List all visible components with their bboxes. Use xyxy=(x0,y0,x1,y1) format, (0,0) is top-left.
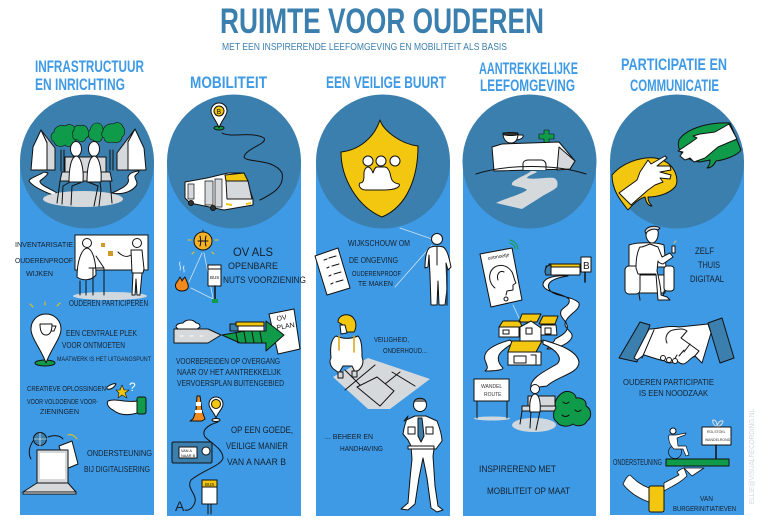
text: van burgerinitiatieven xyxy=(673,496,736,513)
text: veiligheid onderhoud: VEILIGHEID, xyxy=(374,337,409,344)
text: centrale plek: MAATWERK IS HET UITGANGSPUNT xyxy=(57,357,151,363)
icon: man in armchair xyxy=(625,226,676,300)
text: wijkschouw xyxy=(348,238,410,288)
icon: kneeling worker on pavement xyxy=(330,315,430,409)
icon: checklist xyxy=(315,248,350,295)
text: wijkschouw: DE ONGEVING xyxy=(349,256,398,265)
icon: hand with star xyxy=(107,380,146,415)
text: beheer en handhaving: ... BEHEER EN xyxy=(325,432,373,441)
panel: mobiliteit xyxy=(167,73,306,516)
icon: wandelroute sign xyxy=(474,379,510,420)
text: ov als openbare nuts voorziening: OV ALS xyxy=(233,245,273,259)
icon: hands reaching to speech bubbles xyxy=(612,123,741,210)
panel: infrastructuur en inrichting xyxy=(15,57,154,515)
text: beheer en handhaving: HANDHAVING xyxy=(340,444,383,453)
icon: car road turning into OV arrow and plan: PLAN xyxy=(276,322,295,332)
text: ondersteuning: BIJ DIGITALISERING xyxy=(84,464,150,474)
text: ov als openbare nuts voorziening: OPENBARE xyxy=(228,261,278,272)
heading: infrastructuur xyxy=(35,57,144,94)
icon: village with winding paths xyxy=(485,276,579,388)
text: zelf thuis digitaal xyxy=(690,246,724,284)
text: voorbereiden op overgang: VERVOERSPLAN BUITENGEBIED xyxy=(177,379,284,388)
icon: route from A to bus stop: A xyxy=(175,498,185,514)
heading: infrastructuur: EN INRICHTING xyxy=(35,75,125,94)
text: inventarisatie: INVENTARISATIE xyxy=(15,240,73,249)
icon: car road turning into OV arrow and plan: OV xyxy=(276,314,288,323)
title: RUIMTE VOOR OUDEREN xyxy=(220,2,544,41)
credit line: ELLIE@VISUALRECORDING.NL xyxy=(747,409,756,504)
icon: map pin with coffee cup xyxy=(30,302,61,366)
icon: smartphone with wifi: ontmoetje xyxy=(487,252,510,262)
panel: participatie en communicatie xyxy=(610,55,744,515)
icon: bulb, flame and bus stop network xyxy=(175,230,221,303)
text: wijkschouw: WIJKSCHOUW OM xyxy=(348,238,410,248)
text: creatieve oplossingen: CREATIEVE OPLOSSINGEN xyxy=(27,386,106,393)
text: creatieve oplossingen: ZIENINGEN xyxy=(40,409,79,416)
text: ondersteuning xyxy=(84,448,152,474)
icon: person on bench with bush xyxy=(512,384,591,432)
text: ov als openbare nuts voorziening: NUTS VOORZIENING xyxy=(223,275,306,286)
text: inventarisatie: OUDERENPROOF xyxy=(15,256,73,265)
text: beheer en handhaving xyxy=(325,432,383,453)
text: veiligheid onderhoud xyxy=(374,337,427,355)
heading: participatie en communicatie xyxy=(621,55,727,95)
heading: participatie en communicatie: PARTICIPATIE EN xyxy=(621,55,727,74)
icon: handshake xyxy=(619,318,734,364)
icon: wandelroute sign: WANDEL xyxy=(481,384,502,390)
heading: aantrekkelijke leefomgeving: AANTREKKELIJKE xyxy=(479,59,578,78)
icon: train and stop B: B xyxy=(583,261,590,272)
text: op een goede: OP EEN GOEDE, xyxy=(231,425,293,435)
icon: route from A to bus stop: NAAR B xyxy=(181,454,196,458)
heading: infrastructuur: INFRASTRUCTUUR xyxy=(35,57,144,76)
text: inventarisatie: WIJKEN xyxy=(26,269,53,278)
heading: aantrekkelijke leefomgeving: LEEFOMGEVING xyxy=(480,76,575,95)
icon: smartphone with wifi xyxy=(480,240,522,318)
icon: route from A to bus stop xyxy=(172,422,223,514)
icon: building with cup, cross and road xyxy=(476,130,586,209)
icon: car road turning into OV arrow and plan xyxy=(174,309,300,354)
icon: laptop with globe and tablet xyxy=(23,432,78,494)
text: ondersteuning: ONDERSTEUNING xyxy=(87,448,152,458)
text: ov als openbare nuts voorziening xyxy=(223,245,306,286)
icon: wandelroute sign: ROUTE xyxy=(484,392,502,398)
panel: aantrekkelijke leefomgeving xyxy=(462,59,596,516)
text: ondersteuning: ONDERSTEUNING xyxy=(613,458,662,467)
text: ouderen participeren: OUDEREN PARTICIPEREN xyxy=(69,299,148,308)
text: zelf thuis digitaal: ZELF xyxy=(695,246,714,256)
text: veiligheid onderhoud: ONDERHOUD... xyxy=(383,348,427,355)
text: inspirerend met mobiliteit op maat xyxy=(479,464,570,496)
text: van burgerinitiatieven: BURGERINITIATIEVEN xyxy=(673,506,736,513)
icon: whiteboard with elder and facilitator xyxy=(73,235,148,300)
text: creatieve oplossingen xyxy=(27,386,106,416)
text: voorbereiden op overgang: VOORBEREIDEN OP OVERGANG xyxy=(176,357,280,366)
icon: hand with star: ? xyxy=(129,380,136,394)
icon: hands carrying wheelchair user and sign xyxy=(623,420,731,512)
heading: aantrekkelijke leefomgeving xyxy=(479,59,578,95)
icon: traffic cone and pin xyxy=(190,396,223,422)
text: wijkschouw: TE MAKEN xyxy=(358,281,393,288)
icon: bus following route to pin: B xyxy=(216,109,222,116)
icon: enforcement officer xyxy=(401,398,443,512)
text: op een goede xyxy=(226,425,293,467)
text: voorbereiden op overgang xyxy=(176,357,284,388)
icon: bus following route to pin xyxy=(185,103,282,210)
text: ouderen participatie noodzaak: IS EEN NOODZAAK xyxy=(639,388,708,398)
icon: bulb, flame and bus stop network: BUS xyxy=(210,275,219,280)
icon: bench with two people xyxy=(29,123,146,207)
text: wijkschouw: OUDERENPROOF xyxy=(352,271,401,278)
icon: man with cane xyxy=(395,228,451,305)
text: voorbereiden op overgang: NAAR OV HET AANTREKKELIJK xyxy=(177,368,282,377)
text: centrale plek: EEN CENTRALE PLEK xyxy=(66,329,138,338)
text: centrale plek xyxy=(57,329,151,363)
subtitle: MET EEN INSPIRERENDE LEEFOMGEVING EN MOBILITEIT ALS BASIS xyxy=(222,42,507,53)
panel: een veilige buurt xyxy=(315,73,451,516)
text: op een goede: VEILIGE MANIER xyxy=(226,441,288,451)
icon: hands carrying wheelchair user and sign: ROLSTOEL xyxy=(707,430,726,434)
text: zelf thuis digitaal: DIGITAAL xyxy=(690,274,724,284)
icon: route from A to bus stop: BUS xyxy=(205,482,214,487)
icon: hands carrying wheelchair user and sign: WANDELROND xyxy=(705,438,731,442)
text: van burgerinitiatieven: VAN xyxy=(700,496,713,503)
text: ouderen participatie noodzaak xyxy=(623,377,714,398)
text: inspirerend met mobiliteit op maat: MOBILITEIT OP MAAT xyxy=(487,486,570,496)
text: centrale plek: VOOR ONTMOETEN xyxy=(62,341,125,350)
text: inspirerend met mobiliteit op maat: INSPIREREND MET xyxy=(479,464,556,474)
heading: participatie en communicatie: COMMUNICATIE xyxy=(630,76,719,95)
text: inventarisatie xyxy=(15,240,73,278)
icon: shield with three people xyxy=(341,120,418,217)
text: ouderen participatie noodzaak: OUDEREN PARTICIPATIE xyxy=(623,377,714,387)
icon: train and stop B xyxy=(545,257,591,282)
icon: route from A to bus stop: VAN A xyxy=(181,449,192,453)
text: op een goede: VAN A NAAR B xyxy=(227,457,286,467)
heading: mobiliteit: MOBILITEIT xyxy=(190,73,267,92)
heading: een veilige buurt: EEN VEILIGE BUURT xyxy=(326,73,446,92)
text: zelf thuis digitaal: THUIS xyxy=(698,260,720,270)
text: creatieve oplossingen: VOOR VOLDOENDE VOOR- xyxy=(27,399,99,406)
